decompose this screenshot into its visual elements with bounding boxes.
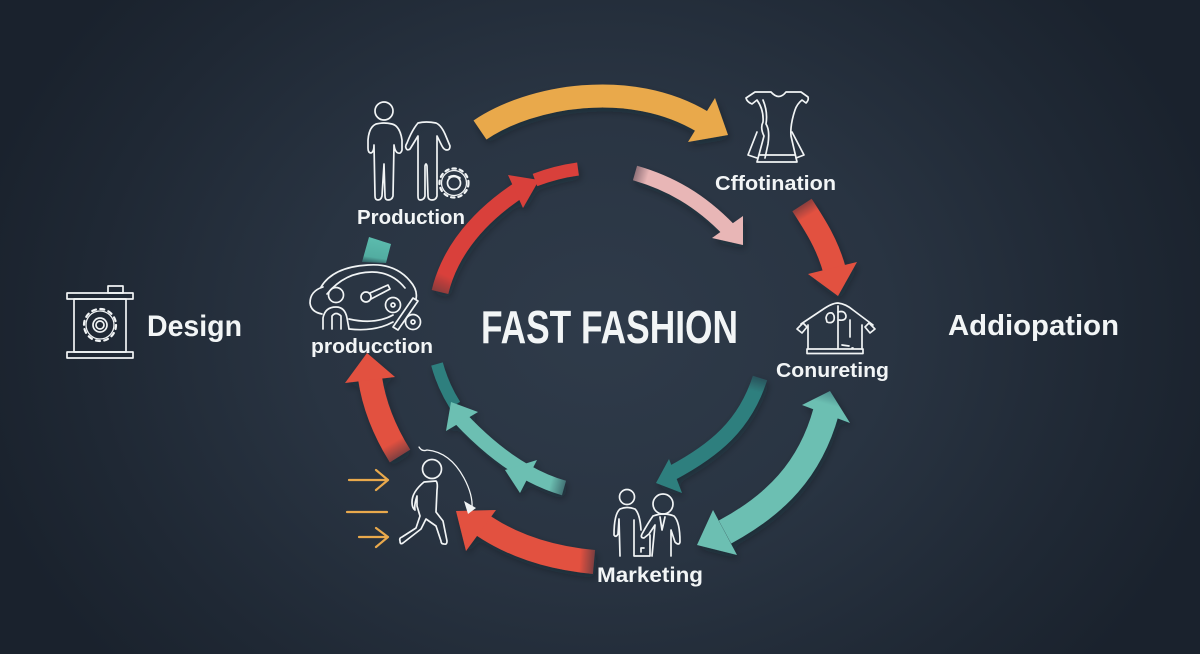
label: Marketing: Marketing bbox=[597, 564, 703, 587]
icon: walking person with curved arrow bbox=[400, 447, 476, 544]
icon: production people with gear bbox=[368, 102, 468, 200]
arrow: red left bbox=[345, 353, 400, 456]
label: Conureting: Conureting bbox=[776, 360, 889, 382]
label: Addiopation: Addiopation bbox=[948, 310, 1119, 342]
label: Production: Production bbox=[357, 207, 465, 229]
icon: gauge with person and percent bbox=[310, 265, 420, 330]
arrow: red right bbox=[802, 205, 857, 296]
arrow: teal inner bottom-left bbox=[437, 364, 564, 493]
label: Cffotination: Cffotination bbox=[715, 173, 836, 195]
icon: jacket bbox=[797, 303, 875, 354]
arrow: pink inner top-right bbox=[635, 173, 743, 245]
teal tab bbox=[362, 237, 391, 263]
arrow: red bottom bbox=[456, 510, 594, 562]
icon: dress bbox=[746, 92, 808, 162]
arrow: orange top bbox=[480, 96, 728, 142]
arrow: red inner top-left bbox=[440, 169, 578, 292]
arrow: light teal double-headed bbox=[697, 391, 850, 555]
icon: design cabinet with gear bbox=[67, 286, 133, 358]
icon: marketing people bbox=[614, 490, 680, 556]
icon: orange motion arrows bbox=[347, 470, 388, 547]
title: FAST FASHION bbox=[481, 301, 738, 353]
label: producction: producction bbox=[311, 336, 433, 358]
arrow: dark teal inner right bbox=[656, 378, 760, 493]
label: Design: Design bbox=[147, 310, 242, 343]
